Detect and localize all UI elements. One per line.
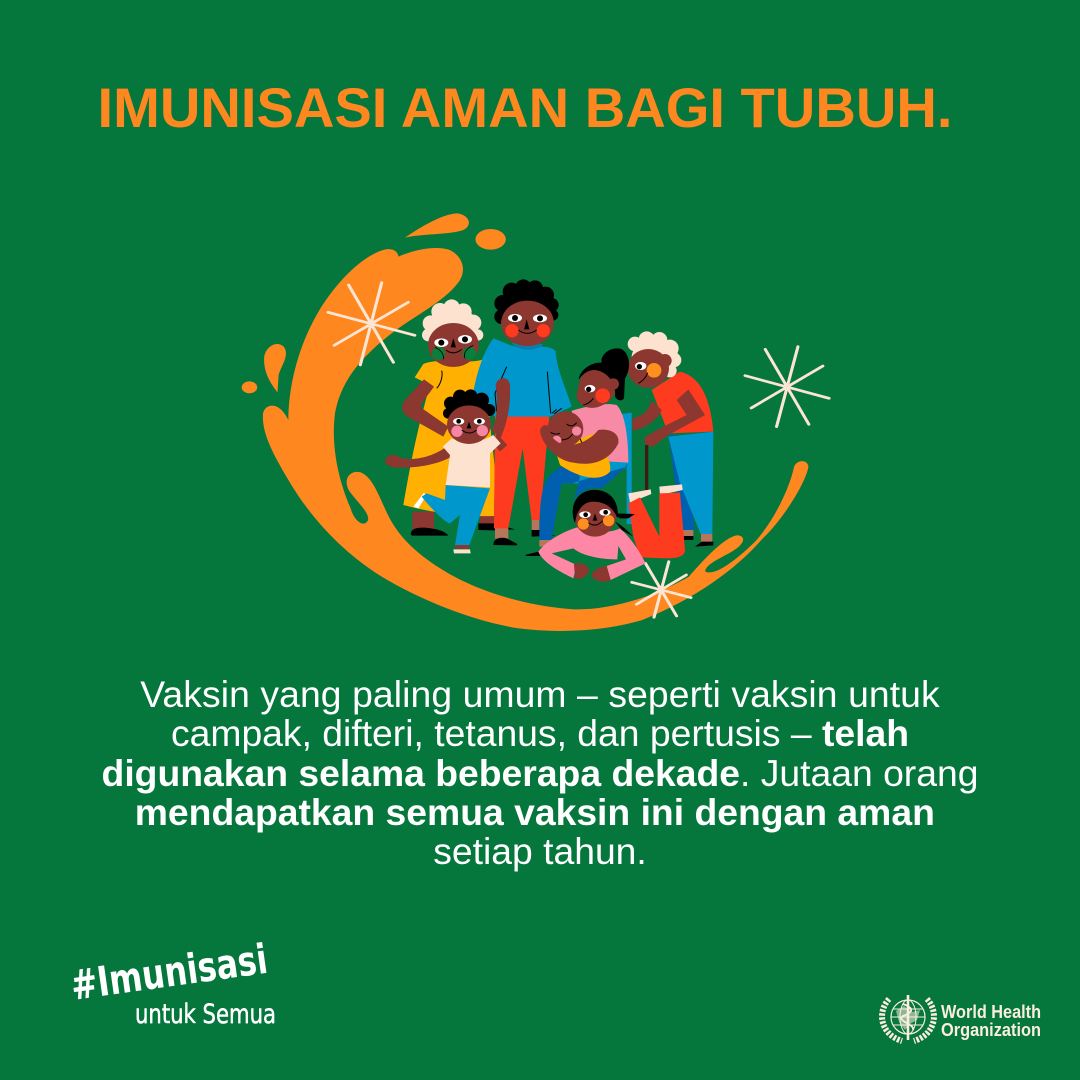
- title: IMUNISASI AMAN BAGI TUBUH.: [98, 76, 952, 139]
- orange splash: [242, 213, 808, 631]
- body text: mendapatkan semua vaksin ini dengan aman: [135, 791, 935, 833]
- body text: digunakan selama beberapa dekade. Jutaan orang: [102, 752, 978, 794]
- body text: campak, difteri, tetanus, dan pertusis – telah: [171, 712, 909, 754]
- body text: setiap tahun.: [433, 830, 647, 872]
- family group: [385, 279, 713, 582]
- person: grandmother in yellow: [402, 299, 515, 536]
- hashtag: #Imunisasi untuk Semua: #Imunisasi: [68, 935, 270, 1010]
- body text: [102, 673, 978, 872]
- person: father in blue and red: [473, 279, 572, 545]
- person: elder with cane: [628, 331, 713, 547]
- chair: [562, 413, 632, 524]
- baby: [547, 408, 610, 478]
- sparkle stars: [328, 283, 829, 617]
- body text: Vaksin yang paling umum – seperti vaksin untuk: [140, 673, 940, 715]
- emblem: globe, staff and wreath: [882, 995, 934, 1041]
- person: child with raised arm: [385, 378, 510, 553]
- logo: World Health Organization: World Health: [941, 1002, 1041, 1022]
- logo: World Health Organization: Organization: [941, 1020, 1041, 1040]
- hashtag: #Imunisasi untuk Semua: untuk Semua: [135, 999, 276, 1030]
- person: mother holding baby: [539, 348, 629, 547]
- person: girl lying on the ground: [525, 484, 685, 582]
